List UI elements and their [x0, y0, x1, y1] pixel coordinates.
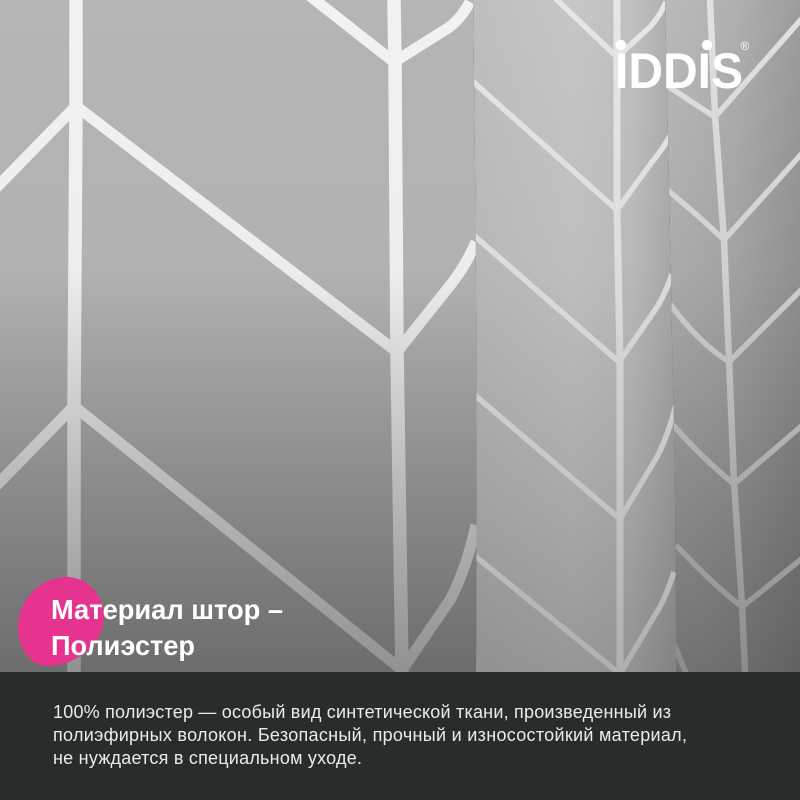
curtain fold: middle: [470, 0, 680, 674]
description text: не нуждается в специальном уходе.: [53, 748, 362, 768]
dark description panel: [0, 672, 800, 800]
heading: Материал штор –: [51, 594, 283, 625]
logo: dot of first i: [616, 40, 626, 50]
description text: полиэфирных волокон. Безопасный, прочный и износостойкий материал,: [53, 725, 687, 745]
logo: registered mark: ®: [740, 39, 750, 53]
logo: iDDiS: [615, 39, 750, 99]
curtain fold: left: [0, 0, 480, 672]
logo: dot of second i: [702, 40, 712, 50]
pink blob accent: [18, 577, 104, 666]
logo wordmark: IDDIS: [615, 43, 743, 99]
curtain fold: right: [660, 0, 800, 675]
description text: 100% полиэстер — особый вид синтетической ткани, произведенный из: [53, 702, 671, 722]
heading: Полиэстер: [51, 630, 195, 661]
